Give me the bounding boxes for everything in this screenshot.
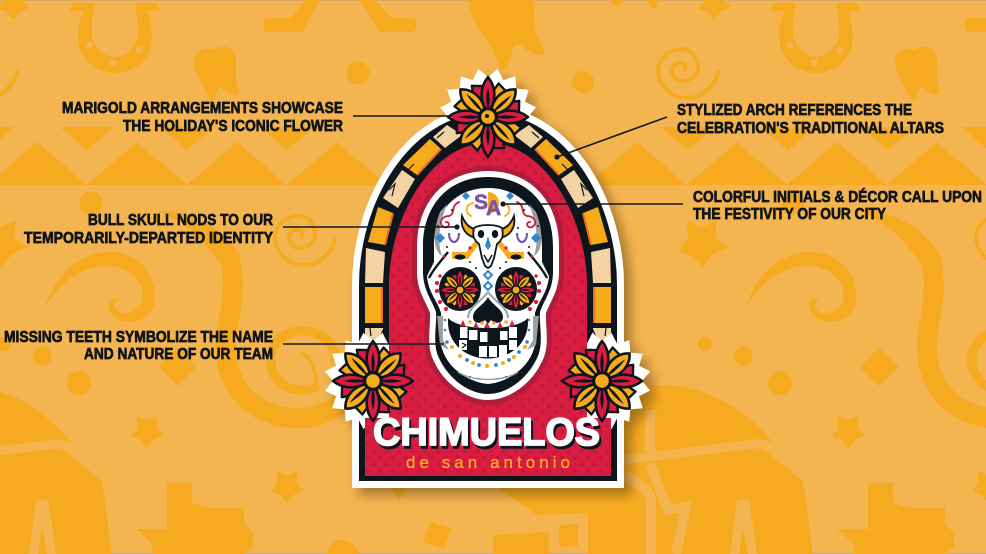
zigzag band	[0, 127, 986, 185]
arch frame	[365, 125, 611, 466]
callout: bull skull	[24, 212, 274, 247]
callout: bull skull: TEMPORARILY-DEPARTED IDENTITY	[24, 230, 274, 247]
callout: arch	[677, 102, 944, 137]
nose	[468, 292, 508, 324]
background icons, left set	[0, 0, 350, 554]
callout: marigold: THE HOLIDAY'S ICONIC FLOWER	[123, 118, 343, 135]
badge	[315, 59, 972, 476]
callout: initials	[693, 189, 982, 223]
callout: arch: STYLIZED ARCH REFERENCES THE	[677, 102, 912, 119]
initials: S	[474, 191, 488, 214]
initials: A	[486, 197, 501, 220]
red panel	[365, 143, 611, 476]
flower: lower left marigold	[333, 341, 413, 421]
callout: missing teeth	[4, 329, 273, 363]
skull side details	[429, 192, 481, 378]
sugar skull	[423, 177, 553, 394]
background centre shapes	[326, 0, 658, 554]
dots around mouth	[444, 319, 530, 380]
callout: initials: THE FESTIVITY OF OUR CITY	[693, 206, 887, 223]
top flower starburst	[430, 59, 546, 175]
team name: CHIMUELOS	[373, 411, 600, 454]
callout: marigold: MARIGOLD ARRANGEMENTS SHOWCASE	[62, 100, 343, 117]
callout: arch: CELEBRATION'S TRADITIONAL ALTARS	[677, 120, 944, 137]
initials	[474, 191, 501, 220]
bull skull	[473, 225, 503, 268]
flower: lower right marigold	[562, 341, 642, 421]
arch bricks left	[365, 125, 462, 350]
callout: bull skull: BULL SKULL NODS TO OUR	[88, 212, 273, 229]
background building, right	[497, 385, 813, 554]
callout: missing teeth: AND NATURE OF OUR TEAM	[84, 346, 273, 363]
centre diamonds	[484, 271, 492, 290]
skull mirrored details	[495, 192, 547, 378]
lower flower starbursts	[315, 323, 660, 439]
flower: top marigold	[448, 77, 972, 157]
callout: marigold	[62, 100, 343, 135]
leader lines	[283, 116, 683, 344]
background building, left	[0, 385, 112, 554]
callout: missing teeth: MISSING TEETH SYMBOLIZE THE NAME	[4, 329, 273, 346]
background icons, right set	[658, 0, 986, 554]
subtitle: de san antonio	[406, 453, 570, 472]
arch bricks right	[514, 125, 611, 350]
mouth and teeth	[448, 318, 528, 358]
